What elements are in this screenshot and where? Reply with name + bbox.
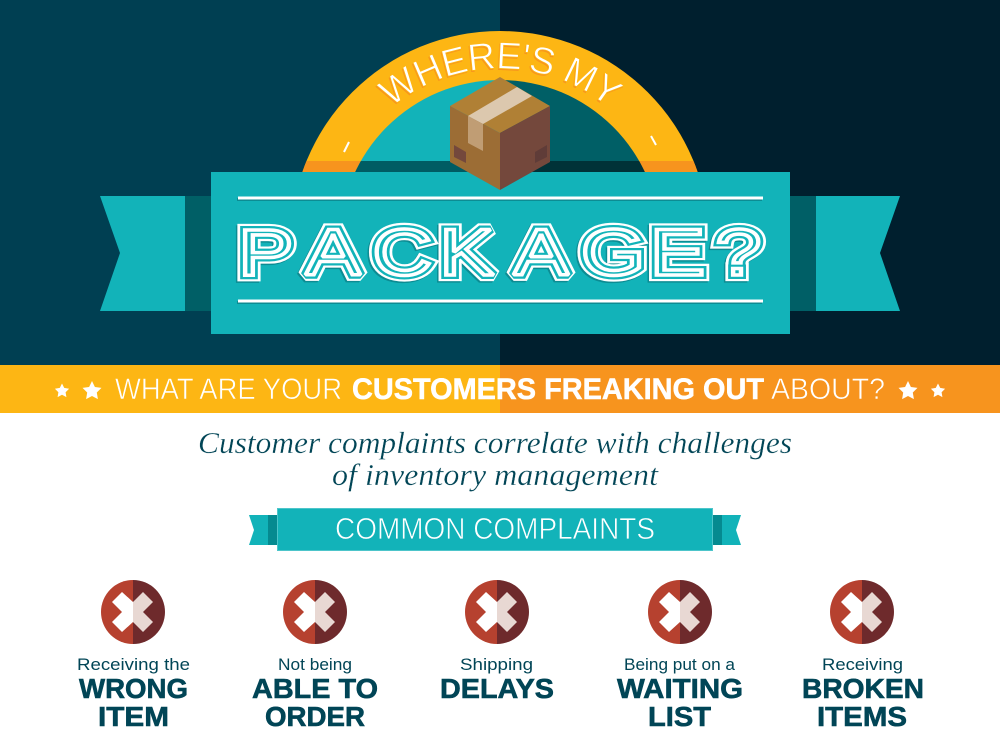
- ribbon tail left: [100, 196, 211, 311]
- icon: red x: [465, 580, 529, 644]
- subtitle text: ABOUT?: [771, 373, 885, 406]
- script intro text: of inventory management: [332, 457, 659, 492]
- subtitle text: CUSTOMERS FREAKING OUT: [352, 373, 764, 406]
- complaint 3: shipping delays: Shipping: [460, 655, 533, 674]
- complaint 4: waiting list: WAITING: [617, 673, 743, 704]
- banner rule top: [237, 196, 763, 201]
- complaint 1: wrong item: [77, 580, 190, 732]
- complaint 5: broken items: [802, 580, 924, 732]
- icon: red x: [648, 580, 712, 644]
- complaint 2: able to order: ABLE TO: [252, 673, 378, 704]
- complaint 4: waiting list: [617, 580, 743, 732]
- complaint 1: wrong item: ITEM: [98, 701, 169, 732]
- complaint 1: wrong item: WRONG: [79, 673, 188, 704]
- main banner: [211, 172, 790, 334]
- subtitle text: [115, 373, 885, 406]
- complaint 2: able to order: Not being: [278, 655, 352, 674]
- complaint 5: broken items: Receiving: [822, 655, 903, 674]
- arch: yellow rainbow behind the title: [302, 31, 698, 172]
- icon: red x: [101, 580, 165, 644]
- icon: red x: [283, 580, 347, 644]
- small ribbon: common complaints: [249, 508, 741, 551]
- small ribbon: common complaints: COMMON COMPLAINTS: [335, 511, 655, 546]
- arched heading: WHERE'S MY: [376, 44, 623, 104]
- complaint 4: waiting list: LIST: [648, 701, 711, 732]
- stars right: [898, 381, 945, 399]
- title: PACKAGE? in concentric stripes: PACKAGE?: [238, 215, 761, 289]
- arch tick marks: [344, 136, 656, 152]
- title: PACKAGE? in concentric stripes: PACKAGE?: [238, 215, 761, 289]
- arched heading: WHERE'S MY: [376, 42, 624, 103]
- header background: [0, 0, 1000, 365]
- icon: cardboard box: [450, 77, 550, 190]
- complaint 3: shipping delays: [440, 580, 554, 704]
- subtitle text: WHAT ARE YOUR: [115, 373, 342, 406]
- icon: red x: [830, 580, 894, 644]
- complaint 5: broken items: ITEMS: [817, 701, 907, 732]
- script intro text: Customer complaints correlate with challenges: [198, 425, 792, 460]
- stars left: [55, 381, 102, 399]
- complaint 2: able to order: [252, 580, 378, 732]
- complaint 4: waiting list: Being put on a: [624, 655, 736, 674]
- title: PACKAGE? in concentric stripes: PACKAGE?: [237, 216, 760, 291]
- complaint 5: broken items: BROKEN: [802, 673, 924, 704]
- ribbon tail right: [790, 196, 900, 311]
- complaint 3: shipping delays: DELAYS: [440, 673, 554, 704]
- banner rule bottom: [237, 300, 763, 304]
- subtitle stripe: [0, 365, 1000, 413]
- complaint 2: able to order: ORDER: [265, 701, 365, 732]
- complaint 1: wrong item: Receiving the: [77, 655, 190, 674]
- script intro text: [198, 425, 792, 492]
- title: PACKAGE? in concentric stripes: PACKAGE?: [238, 215, 761, 289]
